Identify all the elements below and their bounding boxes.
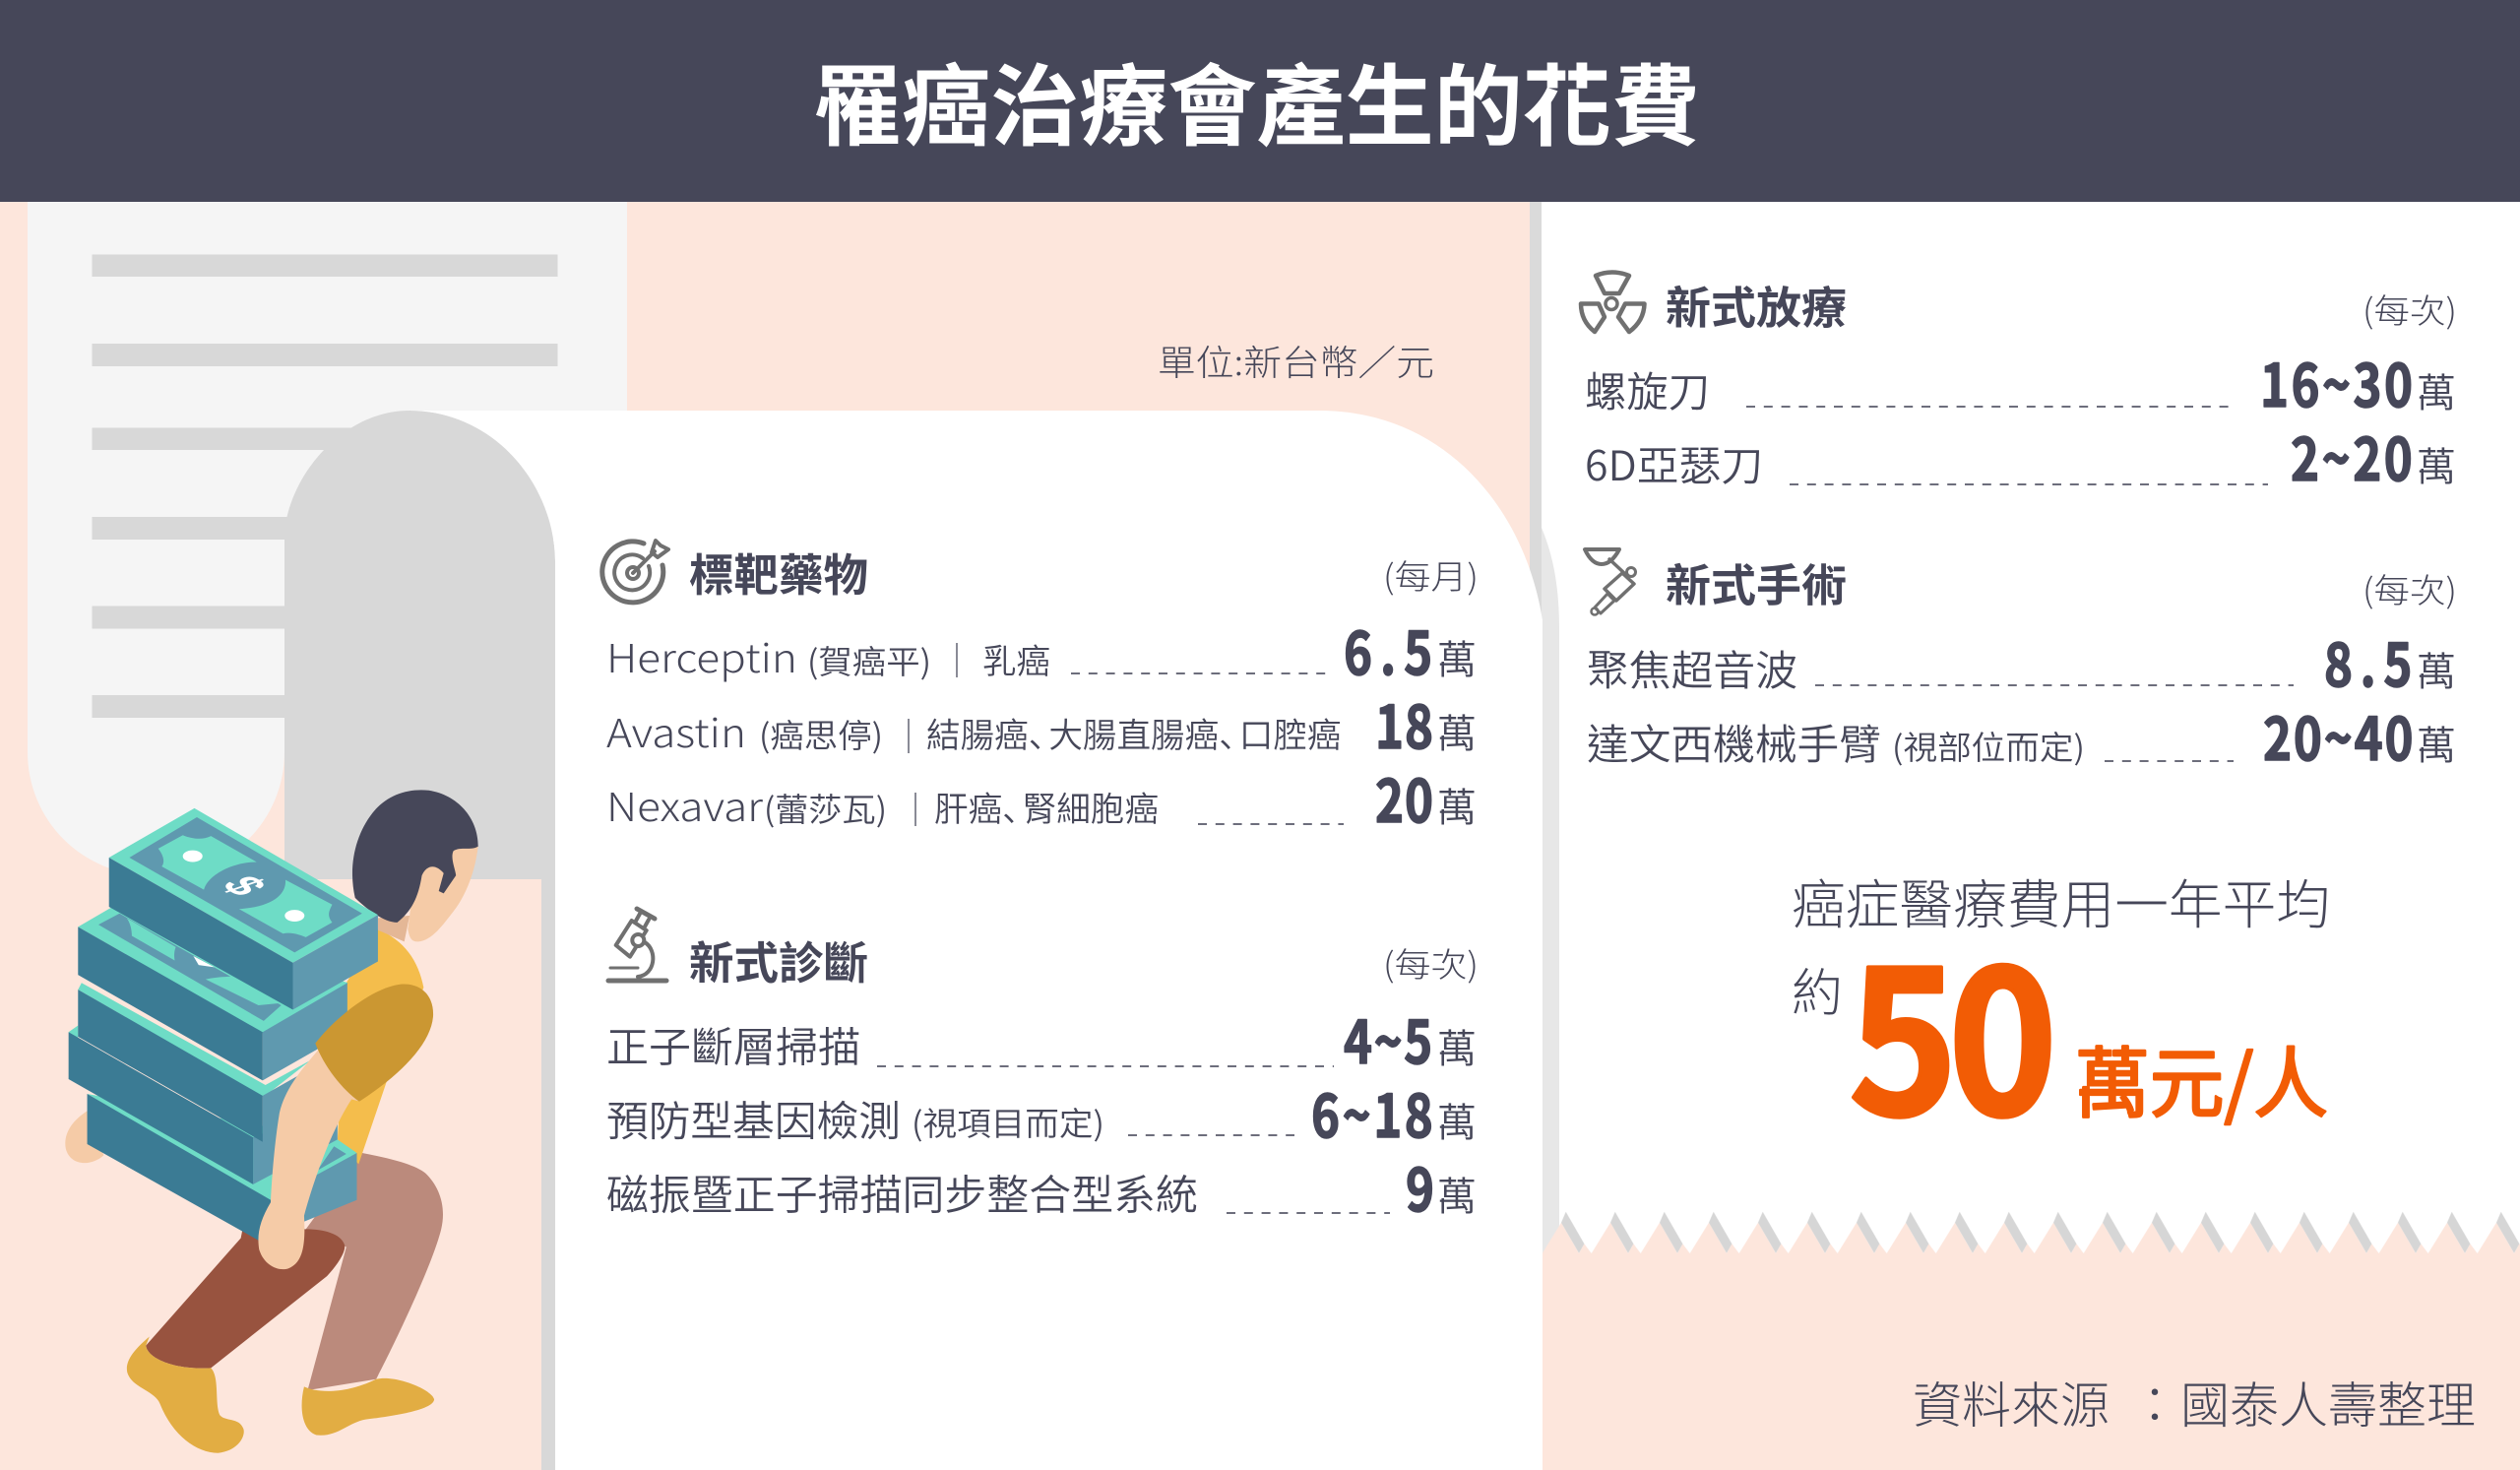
row: PET-CT [606,994,1477,1080]
unit note: 單位:新台幣／元 [1158,335,1434,386]
row: focused ultrasound [1587,617,2456,703]
dollar sign: $ [210,871,278,901]
row: helical tomotherapy: 螺旋刀 [1585,359,1710,419]
row: PET-MRI: 9 [1406,1142,1434,1228]
back leg [306,1153,443,1390]
row: Herceptin: (賀癌平) [807,636,931,683]
source note: 國泰人壽整理 [2180,1367,2476,1438]
section: new diagnostics [606,909,1479,1228]
front shoe [127,1336,244,1453]
unit: 萬元/人 [2075,1023,2328,1133]
section: new radiotherapy [1581,272,2457,497]
front leg [146,1229,345,1369]
hair [352,790,478,923]
row: Avastin: 萬 [1437,702,1477,759]
row: genetic test: 6~18 [1311,1068,1433,1154]
row: Herceptin: Herceptin [606,627,797,684]
row: focused ultrasound: 萬 [2417,640,2456,697]
header bar [0,0,2520,202]
icon: radiation [1581,272,1644,332]
neck [378,916,410,941]
heading: 新式診斷 [689,927,868,991]
row: Avastin: 結腸癌、大腸直腸癌、口腔癌 [926,708,1342,757]
source note: 資料來源 [1913,1367,2110,1438]
source note: ： [2130,1367,2179,1438]
row: Nexavar: Nexavar [606,776,764,833]
row: Herceptin: 乳癌 [982,634,1050,683]
row: 6D CyberKnife: 萬 [2417,435,2456,492]
row: da Vinci arm [1587,691,2456,777]
row: da Vinci arm: 萬 [2417,714,2456,771]
background document sheet [28,202,627,875]
sleeve [315,985,433,1102]
row: Nexavar: 20 [1375,753,1433,839]
row: genetic test: 萬 [1437,1091,1477,1148]
period note: (每次) [1383,938,1479,987]
row: genetic test [606,1068,1477,1154]
row: focused ultrasound: 聚焦超音波 [1587,638,1797,698]
row: helical tomotherapy: 萬 [2417,361,2456,418]
row: focused ultrasound: 8.5 [2324,617,2412,703]
big number: 50 [1849,885,2057,1173]
row: 6D CyberKnife: 6D亞瑟刀 [1585,433,1763,493]
callout lead text: 癌症醫療費用一年平均 [1792,862,2330,939]
near arm [258,1050,360,1269]
row: Avastin: Avastin [606,702,746,759]
row: PET-MRI [606,1142,1477,1228]
grey arch shadow behind main panel [284,411,555,1470]
heading: 新式放療 [1666,272,1847,337]
period note: (每月) [1383,550,1479,599]
row: PET-CT: 萬 [1437,1017,1477,1074]
money stack [69,808,378,1241]
row: PET-MRI: 萬 [1437,1165,1477,1222]
row: 6D CyberKnife: 2~20 [2291,412,2413,497]
row: genetic test: (視項目而定) [912,1098,1104,1145]
section: targeted drugs [602,540,1479,839]
row: Nexavar: (蕾莎瓦) [764,784,887,831]
heading: 標靶藥物 [689,540,868,604]
row: PET-CT: 4~5 [1344,994,1432,1080]
period note: (每次) [2362,564,2457,612]
row: genetic test: 預防型基因檢測 [606,1089,901,1148]
row: 6D CyberKnife [1585,412,2456,497]
icon: scalpel arm [1585,549,1636,614]
illustration: man carrying stack of money [65,790,478,1453]
row: PET-CT: 正子斷層掃描 [606,1014,860,1075]
shirt [338,929,423,1164]
approx label: 約 [1792,952,1843,1026]
far hand [65,1111,103,1163]
row: da Vinci arm: (視部位而定) [1892,722,2085,769]
row: PET-MRI: 磁振暨正子掃描同步整合型系統 [606,1162,1198,1223]
row: Avastin: (癌思停) [759,710,883,757]
face [408,845,478,941]
row: helical tomotherapy [1585,338,2456,423]
row: Herceptin: 6.5 [1344,606,1432,691]
row: Nexavar: 萬 [1437,776,1477,833]
icon: target [602,541,668,603]
row: Herceptin: 萬 [1437,628,1477,685]
row: Herceptin [606,606,1477,691]
callout: average annual cost [1792,862,2330,1173]
row: Nexavar: 肝癌、腎細胞癌 [934,782,1159,831]
row: Nexavar [606,753,1477,839]
section: new surgery [1585,549,2457,777]
title: 罹癌治療會產生的花費 [813,35,1700,163]
icon: microscope [608,909,666,981]
row: Avastin [606,679,1477,765]
period note: (每次) [2362,285,2457,333]
row: Avastin: 18 [1375,679,1433,765]
row: da Vinci arm: 達文西機械手臂 [1587,712,1881,772]
panel: right receipt [1530,202,2520,1470]
heading: 新式手術 [1666,549,1847,614]
back shoe [302,1378,434,1436]
row: helical tomotherapy: 16~30 [2260,338,2413,423]
panel: main white card [410,411,1543,1470]
row: da Vinci arm: 20~40 [2263,691,2414,777]
